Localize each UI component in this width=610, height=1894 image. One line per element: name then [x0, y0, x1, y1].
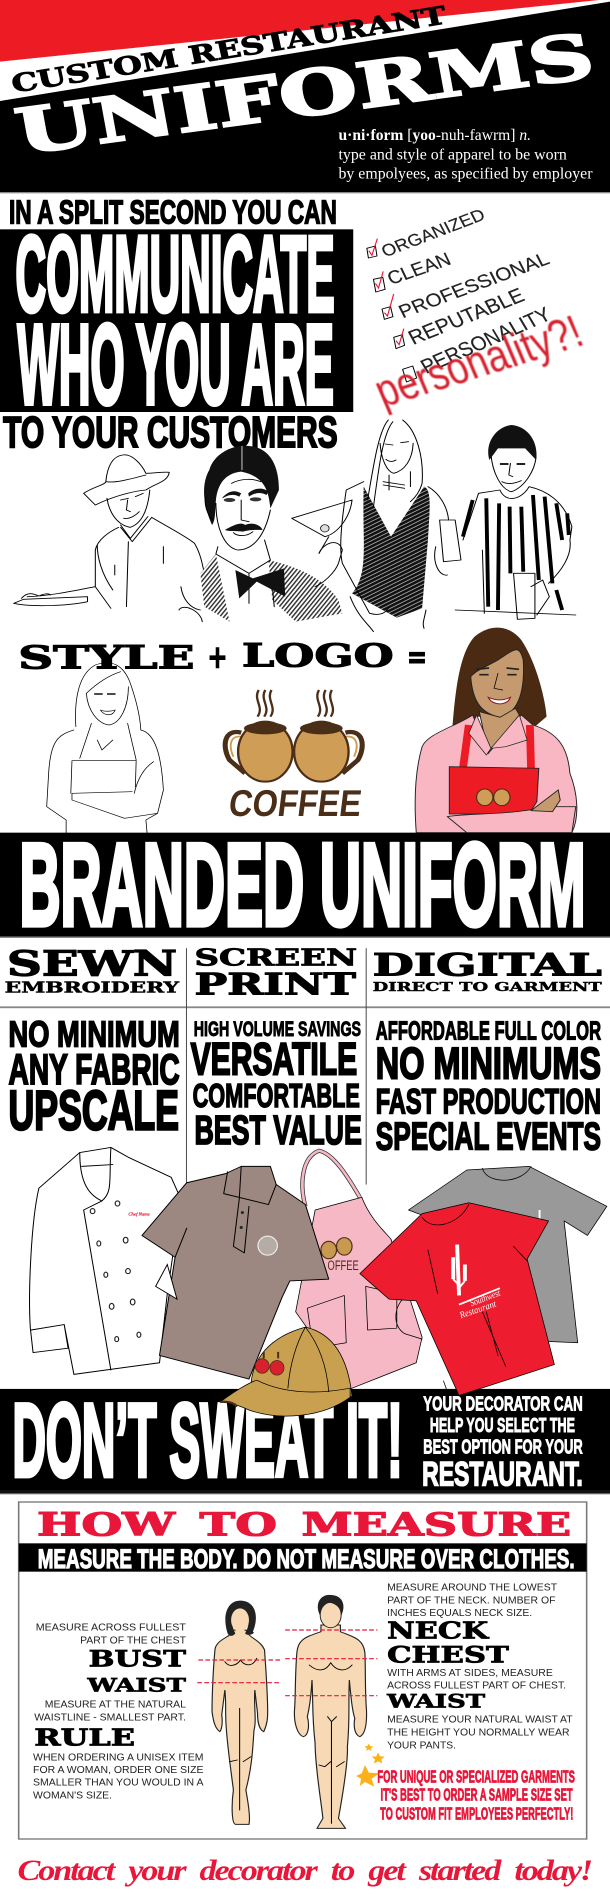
dictionary definition: type and style of apparel to be worn: [338, 146, 567, 163]
uniform outline woman: [47, 663, 163, 833]
chef jacket: Chef Name: [128, 1212, 150, 1216]
waiter with mustache and bow tie: [200, 446, 342, 622]
column 1: sewn embroidery: EMBROIDERY: [5, 979, 179, 996]
column 1: sewn embroidery: [5, 943, 180, 1142]
women's measurement notes: BUST: [89, 1646, 186, 1672]
handwritten checklist: REPUTABLE: [404, 283, 528, 349]
column 2: screen print: PRINT: [195, 968, 356, 1002]
illustration: four servers: [14, 420, 576, 632]
men's measurement notes: YOUR PANTS.: [387, 1740, 456, 1751]
column 2: screen print: BEST VALUE: [195, 1107, 362, 1153]
heading: style plus logo equals: [18, 637, 427, 677]
handwritten checklist: PROFESSIONAL: [395, 249, 553, 323]
women's measurement notes: SMALLER THAN YOU WOULD IN A: [33, 1777, 204, 1788]
heading: in a split second: IN A SPLIT SECOND YOU CAN: [9, 193, 337, 231]
men's measurement notes: THE HEIGHT YOU NORMALLY WEAR: [387, 1727, 570, 1738]
men's body figure: [294, 1595, 367, 1828]
referee-shirt server: [435, 425, 576, 619]
heading: how to measure: MEASURE: [301, 1506, 571, 1544]
panel: style plus logo equation: [18, 628, 577, 833]
pink apron: [296, 1151, 422, 1389]
branded colored woman: [415, 628, 577, 833]
women's measurement notes: WAIST: [86, 1674, 186, 1696]
bartender with martini: [292, 420, 449, 632]
heading: how to measure: TO: [200, 1506, 277, 1544]
pink apron: OFFEE: [328, 1258, 359, 1274]
illustration: garments: [30, 1147, 607, 1416]
women's measurement notes: [33, 1622, 204, 1801]
men's measurement notes: WITH ARMS AT SIDES, MEASURE: [387, 1668, 553, 1679]
column 3: digital direct to garment: DIRECT TO GARMENT: [373, 980, 602, 995]
heading: style plus logo equals: =: [407, 638, 427, 676]
handwritten checklist: ORGANIZED: [378, 205, 488, 261]
banner: don't sweat it: [0, 1382, 610, 1498]
women's measurement notes: RULE: [34, 1725, 135, 1751]
panel: communicate who you are: [0, 193, 590, 457]
coffee logo: [225, 690, 364, 824]
black headline box: [0, 229, 353, 412]
handwritten checklist: PERSONALITY: [416, 302, 555, 378]
column 1: sewn embroidery: SEWN: [7, 943, 177, 984]
red t-shirt with cactus logo: Southwest: [468, 1288, 502, 1309]
column 1: sewn embroidery: ANY FABRIC: [9, 1046, 180, 1093]
sample size callout: [377, 1768, 575, 1824]
men's measurement notes: MEASURE YOUR NATURAL WAIST AT: [387, 1714, 573, 1725]
dictionary definition: u·ni·form [yoo-nuh-fawrm] n.: [338, 126, 531, 144]
column 2: screen print: HIGH VOLUME SAVINGS: [194, 1017, 361, 1041]
column 3: digital direct to garment: DIGITAL: [373, 946, 602, 983]
icon: gold stars: [356, 1743, 385, 1787]
call to action: Contact your decorator to get started today!: [18, 1854, 593, 1886]
decorator advice: [422, 1393, 583, 1493]
red t-shirt with cactus logo: Restaurant: [457, 1299, 498, 1321]
heading: style plus logo equals: STYLE: [18, 639, 195, 677]
title: uniforms: UNIFORMS: [10, 19, 599, 169]
handwritten checklist: CLEAN: [384, 249, 454, 289]
heading: how to measure: [37, 1506, 571, 1544]
women's measurement notes: WAISTLINE - SMALLEST PART.: [34, 1712, 186, 1723]
column 1: sewn embroidery: UPSCALE: [9, 1080, 179, 1142]
column 2: screen print: VERSATILE: [191, 1033, 357, 1084]
tan baseball cap: [220, 1327, 352, 1416]
heading: how to measure: HOW: [37, 1506, 176, 1544]
red t-shirt with cactus logo: [360, 1203, 554, 1395]
cowboy server: [14, 455, 204, 622]
men's measurement notes: INCHES EQUALS NECK SIZE.: [387, 1608, 532, 1619]
heading: style plus logo equals: +: [207, 638, 228, 676]
handwritten checklist: [367, 205, 555, 382]
taupe polo shirt: [142, 1166, 329, 1379]
grey t-shirt: [408, 1166, 607, 1343]
dictionary definition: [338, 126, 593, 182]
column 2: screen print: COMFORTABLE: [193, 1078, 360, 1115]
women's measurement notes: MEASURE ACROSS FULLEST: [36, 1622, 186, 1633]
panel: decoration methods comparison: [0, 937, 610, 1185]
subtitle: custom restaurant: CUSTOM RESTAURANT: [9, 1, 449, 99]
women's measurement notes: WOMAN'S SIZE.: [33, 1790, 112, 1801]
men's measurement notes: NECK: [387, 1617, 490, 1644]
men's measurement notes: MEASURE AROUND THE LOWEST: [387, 1582, 557, 1593]
women's body figure: [212, 1601, 268, 1824]
men's measurement notes: PART OF THE NECK. NUMBER OF: [387, 1595, 556, 1606]
black header background: [0, 2, 610, 192]
women's measurement notes: MEASURE AT THE NATURAL: [45, 1699, 186, 1710]
women's measurement notes: PART OF THE CHEST: [80, 1635, 186, 1646]
men's measurement notes: [386, 1582, 573, 1751]
men's measurement notes: CHEST: [387, 1642, 509, 1668]
column 2: screen print: [191, 944, 362, 1153]
red corner banner: [0, 0, 599, 62]
heading: to your customers: TO YOUR CUSTOMERS: [3, 408, 338, 457]
panel: header: [0, 0, 610, 193]
column 3: digital direct to garment: [373, 946, 602, 1158]
chef jacket: [30, 1147, 181, 1374]
coffee logo: COFFEE: [227, 782, 364, 824]
women's measurement notes: WHEN ORDERING A UNISEX ITEM: [33, 1752, 203, 1763]
heading: style plus logo equals: LOGO: [242, 637, 394, 675]
column 1: sewn embroidery: NO MINIMUM: [9, 1014, 180, 1054]
column 2: screen print: SCREEN: [195, 944, 357, 971]
measurement dashed guides: [197, 1630, 377, 1696]
panel: how to measure: [0, 1490, 610, 1886]
men's measurement notes: ACROSS FULLEST PART OF CHEST.: [387, 1680, 566, 1691]
women's measurement notes: FOR A WOMAN, ORDER ONE SIZE: [33, 1765, 203, 1776]
men's measurement notes: WAIST: [386, 1690, 485, 1712]
